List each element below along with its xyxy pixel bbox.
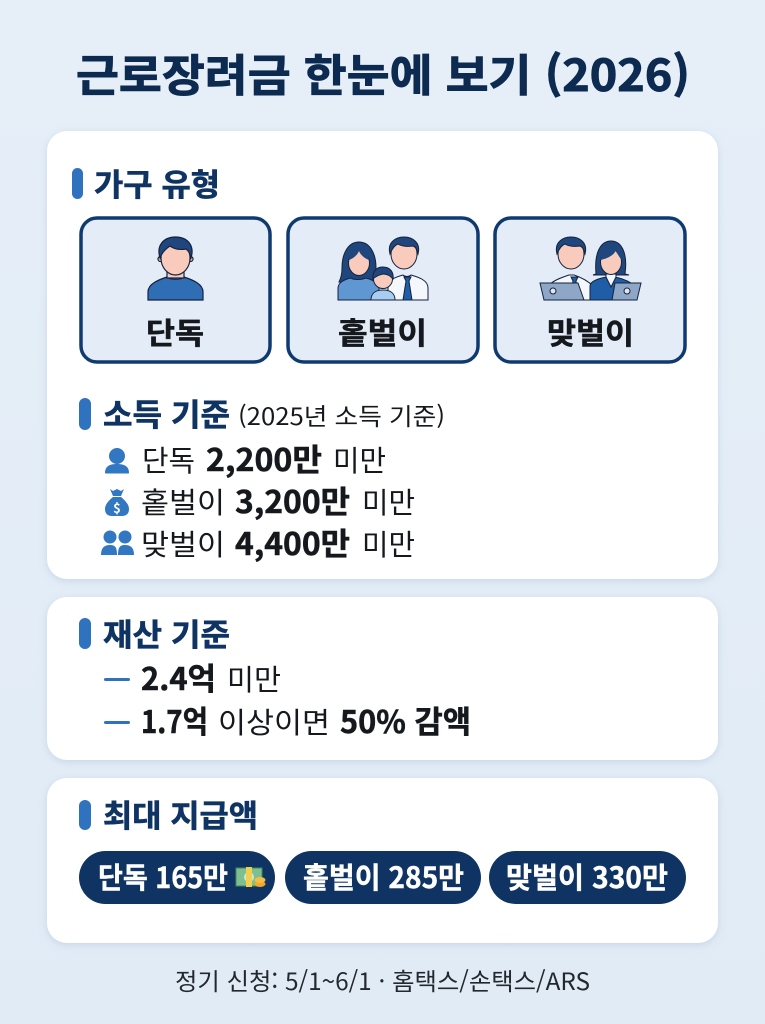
icon: single person [148, 237, 203, 300]
row: dual earner income: 맞벌이 [141, 522, 225, 564]
row: single income: 2,200만 [206, 435, 322, 480]
row: single earner income [105, 477, 415, 522]
pill: dual earner 330: 맞벌이 330만 [506, 855, 668, 897]
row: single earner income: 3,200만 [235, 477, 350, 522]
heading: asset criteria: 재산 기준 [103, 610, 230, 655]
row: asset reduction: 이상이면 [218, 700, 330, 742]
title: 근로장려금 한눈에 보기 (2026) [76, 40, 690, 104]
card: dual earner [495, 218, 685, 362]
icon: couple with laptops [540, 237, 641, 300]
row: single income [105, 435, 386, 480]
panel: asset criteria [47, 597, 718, 760]
pill: dual earner 330 [489, 851, 686, 904]
row: asset reduction: 50% 감액 [340, 697, 471, 742]
heading: household type: 가구 유형 [94, 160, 220, 205]
pill: single earner 285: 홑벌이 285만 [303, 855, 464, 897]
heading: maximum payment: 최대 지급액 [103, 791, 258, 836]
row: single earner income: 홑벌이 [141, 480, 225, 522]
card: single earner: 홑벌이 [338, 309, 427, 353]
icon: person [105, 448, 129, 474]
row: asset reduction: 1.7억 [141, 697, 208, 742]
row: dual earner income: 4,400만 [235, 519, 350, 564]
row: asset reduction [104, 697, 471, 742]
row: asset limit [104, 654, 281, 699]
pill: single earner 285 [285, 851, 481, 904]
row: asset limit: 2.4억 [141, 654, 216, 699]
row: single income: 단독 [142, 438, 195, 480]
heading: income criteria [79, 390, 445, 435]
icon: family [338, 237, 428, 300]
pill: single 165 [79, 851, 275, 904]
card: single: 단독 [146, 309, 204, 353]
icon: cash and coins [236, 867, 266, 887]
row: dual earner income: 미만 [362, 522, 415, 564]
row: dual earner income [101, 519, 415, 564]
card: dual earner: 맞벌이 [547, 309, 634, 353]
card: single earner [288, 218, 478, 362]
heading: income criteria: (2025년 소득 기준) [238, 397, 445, 432]
panel: household types and income [47, 131, 718, 579]
row: single earner income: 미만 [362, 480, 415, 522]
row: single income: 미만 [333, 438, 386, 480]
card: single [81, 218, 270, 362]
icon: two people [101, 530, 134, 555]
footer: application info: 정기 신청: 5/1~6/1 · 홈택스/손택스/ARS [175, 962, 590, 997]
heading: income criteria: 소득 기준 [103, 390, 230, 435]
pill: single 165: 단독 165만 [98, 855, 228, 897]
icon: money bag [105, 489, 129, 517]
row: asset limit: 미만 [227, 657, 281, 699]
panel: maximum payment [47, 778, 718, 943]
icon: money bag: $ [113, 498, 121, 517]
